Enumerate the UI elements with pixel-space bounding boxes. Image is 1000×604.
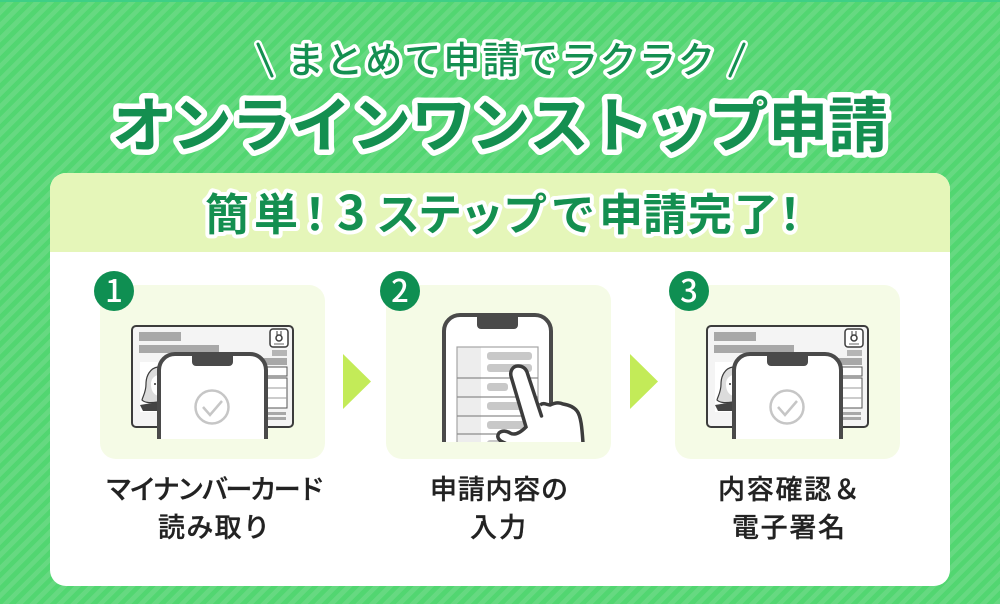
badge 1 — [94, 266, 134, 311]
title: オンラインワンストップ申請 — [112, 78, 888, 165]
subtitle: まとめて申請でラクラク — [287, 30, 715, 84]
illustration: card and phone — [707, 326, 868, 450]
badge 3 — [669, 266, 709, 311]
step 2 label: 入力 — [470, 506, 526, 545]
step 1 label: 読み取り — [158, 506, 270, 545]
heading: 3 — [337, 174, 365, 244]
heading: ステップで申請完了！ — [376, 179, 812, 243]
step 1 label: マイナンバーカード — [105, 468, 325, 507]
illustration: phone form and hand — [444, 315, 583, 457]
illustration: card and phone — [132, 326, 293, 450]
badge 2 — [380, 266, 420, 311]
heading: 簡単！ — [205, 179, 337, 243]
step 1 label — [105, 468, 325, 545]
arrow 1 — [343, 354, 371, 409]
main panel — [50, 173, 950, 586]
step 3 label: 電子署名 — [732, 506, 845, 545]
step 3 panel — [669, 266, 900, 545]
arrow 2 — [630, 354, 658, 409]
badge 2: 2 — [391, 266, 409, 311]
step 2 panel — [380, 266, 611, 545]
step 3 label: 内容確認＆ — [718, 468, 860, 507]
step 1 panel — [94, 266, 325, 545]
badge 3: 3 — [680, 266, 698, 311]
panel header — [50, 173, 950, 252]
step 2 label: 申請内容の — [430, 468, 568, 507]
badge 1: 1 — [105, 266, 123, 311]
step 3 label — [718, 468, 860, 545]
step 2 label — [430, 468, 568, 545]
